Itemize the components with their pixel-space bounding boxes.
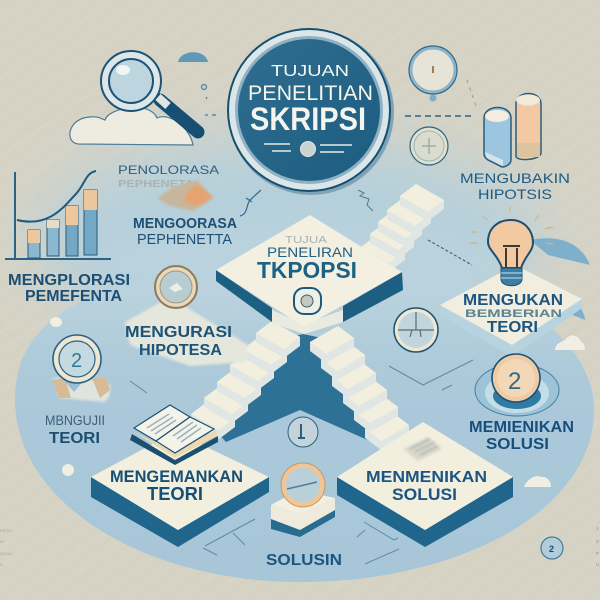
title: PENELITIAN [248, 82, 373, 105]
icon: central badge [294, 288, 321, 314]
footnote: left: ESOLI [0, 528, 12, 533]
icon: light bulb [470, 207, 553, 286]
icon: document [403, 437, 442, 461]
label: penolorasa: PEPHENETA [118, 179, 194, 190]
footnote: right: D [596, 539, 600, 544]
footnote: left: HI [0, 539, 4, 544]
panel: right platform shape [440, 207, 590, 357]
title [248, 63, 373, 137]
label: mengemankan [110, 468, 243, 504]
stairs: upper right flight [361, 184, 444, 272]
label: mengurasi: HIPOTESA [139, 342, 222, 359]
label: mengoorasa [133, 216, 237, 248]
icon: cylinders [484, 94, 541, 167]
title: TUJUAN [271, 63, 349, 80]
icon: open book [130, 405, 218, 465]
label: memienikan: SOLUSI [486, 436, 549, 453]
decorative strokes on floor [130, 381, 399, 564]
label: memienikan: MEMIENIKAN [469, 419, 574, 436]
label: mengoorasa: MENGOORASA [133, 216, 237, 232]
label: mengemankan: TEORI [147, 484, 203, 504]
arrow: dotted diagonal [467, 80, 476, 106]
footnote: left [0, 528, 12, 567]
icon: number medal with hands [50, 335, 110, 402]
label: penolorasa [118, 165, 219, 190]
icon: bottom right number: 2 [549, 544, 554, 554]
stairs: lower left flight [191, 321, 300, 439]
label: mengplorasi [8, 272, 130, 305]
label: memienikan [469, 419, 574, 453]
panel: mengemankan platform [91, 405, 269, 547]
footnote: right: P [596, 551, 599, 556]
icon: upper circle [409, 46, 457, 102]
title: SKRIPSI [250, 101, 366, 137]
label: menguji teori: MBNGUJII [45, 413, 105, 428]
blue glow behind upper section [40, 140, 540, 340]
label: mengukan [463, 292, 563, 336]
panel: mengurasi platform [125, 266, 248, 366]
icon: small cloud [178, 52, 208, 62]
icon: number coin: 2 [508, 368, 521, 395]
label: mengukan: TEORI [487, 319, 538, 336]
label: mengurasi: MENGURASI [125, 324, 232, 341]
label: central platform: PENELIRAN [267, 244, 353, 260]
arrow: crack near stairs [358, 190, 373, 211]
label: mengubakin: HIPOTSIS [478, 186, 552, 202]
label: mengukan: MENGUKAN [463, 292, 563, 309]
icon: window circle [394, 308, 438, 352]
footnote: right: U [596, 562, 599, 567]
decorative lines [389, 360, 473, 390]
label: mengplorasi: PEMEFENTA [25, 288, 122, 305]
stairs: blue support [215, 334, 385, 442]
footnote: right: 1 [596, 526, 599, 531]
arrow: dashed connector [405, 115, 472, 117]
footnote: right [596, 526, 600, 567]
panel: central platform [216, 215, 403, 334]
label: mengukan: BEMBERIAN [465, 308, 562, 320]
panel: centre bottom icon [271, 417, 335, 537]
icon: dots [202, 84, 216, 115]
label: menguji teori [45, 413, 105, 447]
floor top blend [100, 222, 500, 302]
bar chart [5, 171, 111, 259]
label: menmenikan [366, 469, 487, 504]
panel: menmenikan platform [337, 422, 513, 547]
stairs: lower right flight [310, 326, 409, 450]
label: mengurasi [125, 324, 232, 359]
label: mengubakin [460, 171, 570, 202]
decorative clouds [50, 317, 585, 487]
label: central platform [257, 235, 357, 283]
icon: magnifier on cloud [70, 51, 198, 145]
arrow: dashed diagonal [428, 240, 472, 265]
label: central platform: TKPOPSI [257, 257, 357, 283]
label: menguji teori: TEORI [49, 430, 100, 447]
icon: lower circle [410, 127, 448, 165]
icon: number coin [475, 354, 559, 416]
icon: bottom right number [541, 537, 563, 559]
label: solusin: SOLUSIN [266, 552, 342, 569]
label: penolorasa: PENOLORASA [118, 165, 219, 177]
icon: crumpled map [157, 180, 214, 211]
label: central platform: TUJUA [285, 235, 327, 246]
footnote: left: N [0, 562, 3, 567]
label: menmenikan: SOLUSI [392, 485, 457, 504]
label: mengplorasi: MENGPLORASI [8, 272, 130, 289]
blue floor ellipse [15, 270, 594, 582]
label: mengemankan: MENGEMANKAN [110, 468, 243, 486]
label: mengubakin: MENGUBAKIN [460, 171, 570, 186]
label: mengoorasa: PEPHENETTA [137, 232, 232, 248]
icon: mengurasi circle [155, 266, 197, 308]
panel: title badge [227, 28, 394, 195]
arrow: small up-right [240, 190, 261, 216]
label: menmenikan: MENMENIKAN [366, 469, 487, 486]
title ornament [264, 142, 352, 156]
footnote: left: SOLUI [0, 551, 12, 556]
icon: number medal with hands: 2 [71, 350, 82, 372]
